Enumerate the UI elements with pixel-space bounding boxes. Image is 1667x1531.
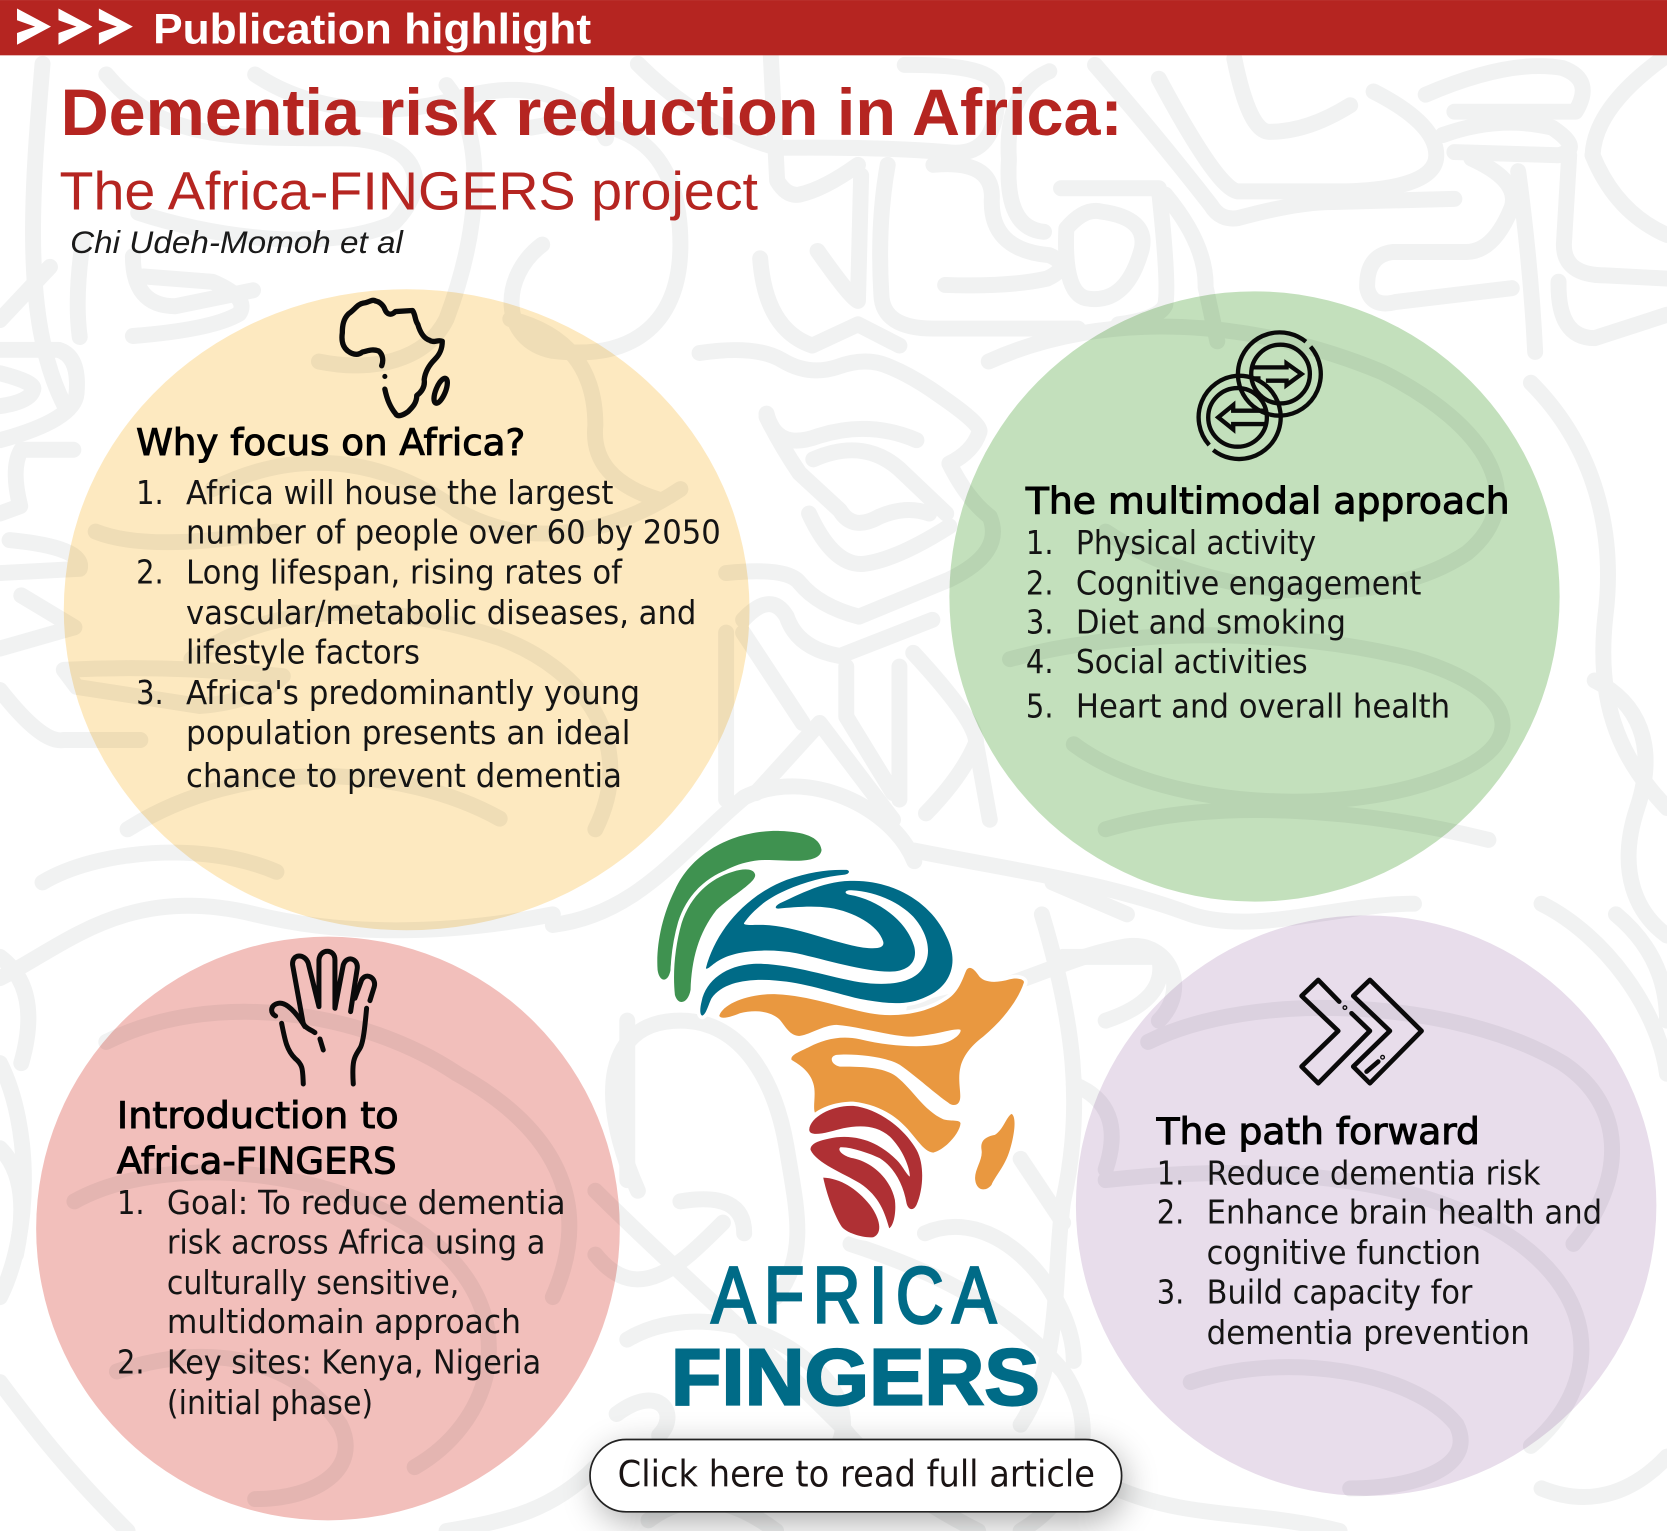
list: chance to prevent dementia xyxy=(186,756,622,795)
list: 1. xyxy=(1157,1153,1184,1192)
list: Build capacity for xyxy=(1207,1272,1473,1311)
list: 1. xyxy=(117,1183,145,1222)
heading: Africa-FINGERS xyxy=(117,1140,397,1183)
list: number of people over 60 by 2050 xyxy=(186,512,721,551)
circle: introduction to Africa-FINGERS xyxy=(36,937,620,1520)
heading: Introduction to xyxy=(117,1094,399,1137)
list: population presents an ideal xyxy=(186,713,630,752)
circle: multimodal approach xyxy=(949,291,1560,902)
button: read full article: Click here to read full article xyxy=(618,1452,1095,1495)
list: Key sites: Kenya, Nigeria xyxy=(167,1343,541,1382)
list xyxy=(1157,1153,1602,1352)
list: 2. xyxy=(1157,1193,1184,1232)
list xyxy=(1026,523,1450,726)
title: Dementia risk reduction in Africa: xyxy=(61,75,1123,149)
logo word: AFRICA: AFRICA xyxy=(711,1251,1005,1340)
list: Africa will house the largest xyxy=(186,473,614,512)
list: 4. xyxy=(1026,642,1054,681)
list: 2. xyxy=(117,1343,145,1382)
list: Goal: To reduce dementia xyxy=(167,1183,566,1222)
panel: introduction to Africa-FINGERS xyxy=(117,951,566,1422)
list xyxy=(117,1183,566,1422)
list: vascular/metabolic diseases, and xyxy=(186,593,696,632)
list: 3. xyxy=(136,673,164,712)
list: 3. xyxy=(1157,1272,1184,1311)
list: Cognitive engagement xyxy=(1076,563,1421,602)
icon: triple chevron xyxy=(17,9,133,45)
list: Reduce dementia risk xyxy=(1207,1153,1540,1192)
list: cognitive function xyxy=(1207,1233,1481,1272)
icon: double chevron xyxy=(1302,980,1422,1083)
list: 2. xyxy=(1026,563,1054,602)
list xyxy=(136,473,721,795)
panel: multimodal approach xyxy=(1025,332,1510,726)
list: culturally sensitive, xyxy=(167,1263,459,1302)
list: Heart and overall health xyxy=(1076,687,1450,726)
heading xyxy=(117,1094,399,1183)
icon: Africa logo map xyxy=(657,831,1024,1237)
list: Social activities xyxy=(1076,642,1308,681)
list: dementia prevention xyxy=(1207,1313,1530,1352)
button: read full article xyxy=(590,1440,1123,1520)
heading: Why focus on Africa? xyxy=(136,421,525,464)
heading: The path forward xyxy=(1156,1110,1480,1153)
list: Diet and smoking xyxy=(1076,603,1346,642)
list: risk across Africa using a xyxy=(167,1222,545,1261)
panel: why focus on Africa xyxy=(136,300,721,795)
circle: why focus on Africa xyxy=(64,289,750,930)
list: multidomain approach xyxy=(167,1302,521,1341)
circle: path forward xyxy=(1076,915,1656,1496)
icon: exchange coins xyxy=(1199,332,1321,459)
list: Africa's predominantly young xyxy=(186,673,640,712)
list: lifestyle factors xyxy=(186,632,420,671)
header bar xyxy=(0,0,1667,55)
logo: Africa-FINGERS xyxy=(657,831,1040,1421)
list: Physical activity xyxy=(1076,523,1316,562)
panel: path forward xyxy=(1156,980,1602,1352)
logo word: FINGERS: FINGERS xyxy=(671,1332,1040,1421)
icon: Africa outline xyxy=(342,300,450,416)
header label: Publication highlight xyxy=(153,7,591,54)
subtitle: The Africa-FINGERS project xyxy=(60,161,758,221)
author: Chi Udeh-Momoh et al xyxy=(70,224,404,260)
list: 3. xyxy=(1026,603,1054,642)
heading: The multimodal approach xyxy=(1025,480,1510,523)
list: Enhance brain health and xyxy=(1207,1193,1602,1232)
list: 5. xyxy=(1026,687,1054,726)
list: 1. xyxy=(136,473,164,512)
list: Long lifespan, rising rates of xyxy=(186,553,623,592)
list: (initial phase) xyxy=(167,1383,373,1422)
list: 2. xyxy=(136,553,164,592)
list: 1. xyxy=(1026,523,1054,562)
icon: hand xyxy=(272,951,375,1084)
